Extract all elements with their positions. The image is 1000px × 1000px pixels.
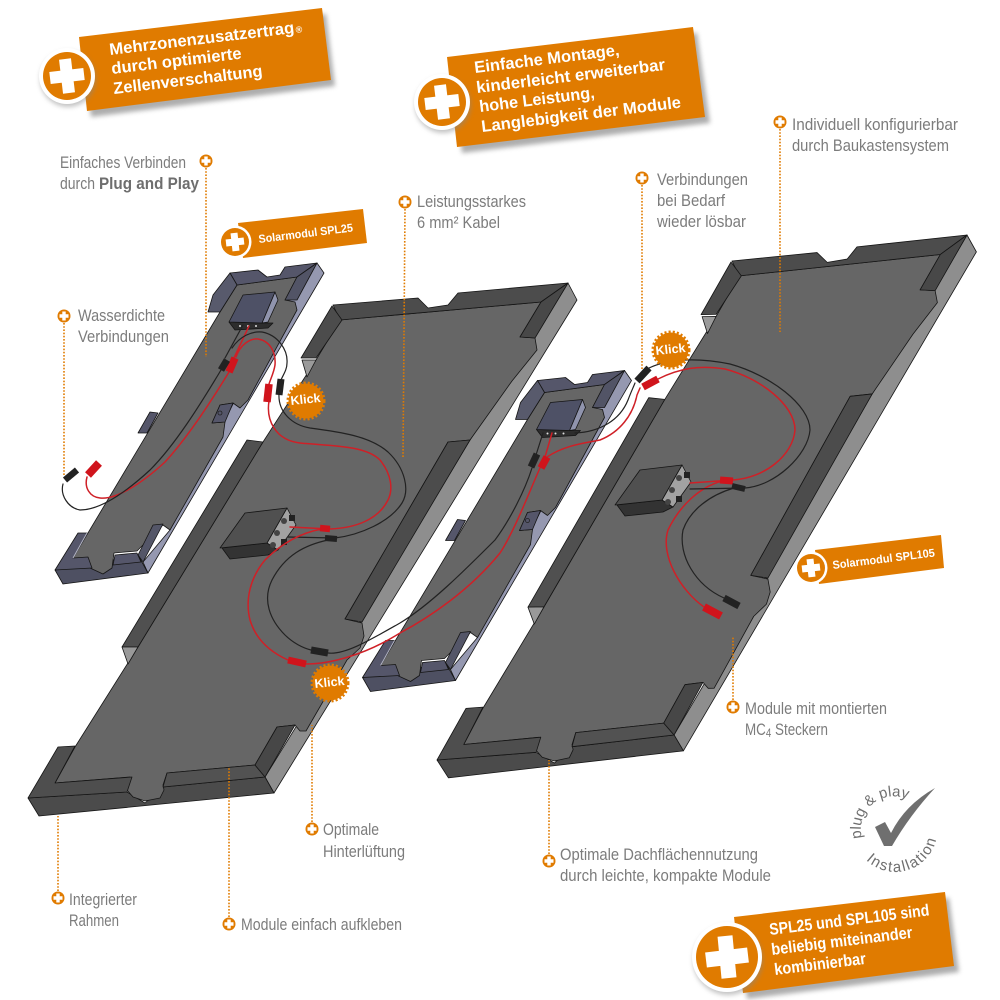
label: Module mit MC4 Steckern bbox=[726, 636, 887, 740]
label: Module einfach aufkleben bbox=[222, 768, 402, 934]
label: Einfaches Verbinden: Einfaches Verbinden bbox=[60, 154, 186, 172]
Klick badge right: Klick bbox=[655, 341, 686, 358]
callout: Mehrzonenzusatzertrag bbox=[39, 8, 335, 117]
solar module SPL105 left bbox=[28, 283, 577, 816]
tag: Solarmodul SPL25: Solarmodul SPL25 bbox=[258, 222, 354, 246]
label: Module einfach aufkleben: Module einfach aufkleben bbox=[241, 916, 402, 934]
label: Integrierter Rahmen bbox=[52, 816, 137, 930]
label: Individuell konfigurierbar: durch Baukastensystem bbox=[792, 137, 949, 155]
Klick badge bottom bbox=[312, 666, 348, 700]
solar module SPL105 right bbox=[426, 235, 988, 778]
plug and play installation stamp: Installation bbox=[867, 838, 936, 872]
label: Verbindungen lösbar bbox=[636, 171, 748, 370]
callout: Mehrzonenzusatzertrag: Mehrzonenzusatzertrag bbox=[108, 19, 295, 59]
Klick badge left: Klick bbox=[290, 391, 321, 408]
callout: Einfache Montage: Einfache Montage, bbox=[473, 41, 620, 77]
solar module SPL25 left bbox=[55, 263, 324, 584]
label: Optimale Hinterlüftung: Optimale bbox=[323, 821, 379, 839]
Klick badge left bbox=[288, 384, 324, 418]
callout: Einfache Montage: Langlebigkeit der Module bbox=[480, 94, 682, 136]
callout: Einfache Montage bbox=[414, 27, 710, 153]
callout: Einfache Montage: hohe Leistung, bbox=[478, 84, 596, 116]
label: Individuell konfigurierbar bbox=[774, 116, 958, 332]
Klick badge bottom: Klick bbox=[314, 674, 345, 691]
callout: SPL25 und SPL105 bbox=[692, 892, 959, 999]
callout: SPL25 und SPL105: kombinierbar bbox=[773, 950, 867, 979]
callout: SPL25 und SPL105: SPL25 und SPL105 sind bbox=[768, 901, 930, 939]
label: Integrierter Rahmen: Rahmen bbox=[69, 912, 119, 930]
label: Einfaches Verbinden: Plug and Play bbox=[99, 175, 200, 193]
label: Optimale Hinterlüftung bbox=[306, 725, 405, 861]
label: Module mit MC4 Steckern: 4 bbox=[766, 726, 772, 740]
callout: Mehrzonenzusatzertrag: durch optimierte bbox=[110, 45, 243, 78]
callout: Einfache Montage: kinderleicht erweiterbar bbox=[475, 56, 667, 97]
label: Leistungsstarkes Kabel bbox=[398, 193, 526, 458]
callout: Mehrzonenzusatzertrag: Zellenverschaltung bbox=[112, 62, 263, 98]
check mark bbox=[875, 788, 935, 846]
tag: Solarmodul SPL25 bbox=[218, 209, 367, 258]
label: Optimale Dachflächennutzung: durch leichte, kompakte Module bbox=[560, 867, 771, 885]
label: Verbindungen lösbar: Verbindungen bbox=[657, 171, 748, 189]
label: Leistungsstarkes Kabel: 6 mm² Kabel bbox=[417, 214, 500, 232]
callout: Mehrzonenzusatzertrag: ® bbox=[295, 24, 303, 35]
label: Module mit MC4 Steckern: Steckern bbox=[771, 721, 828, 739]
label: Optimale Dachflächennutzung bbox=[542, 760, 771, 885]
tag: Solarmodul SPL105 bbox=[794, 535, 944, 584]
tag: Solarmodul SPL105: Solarmodul SPL105 bbox=[832, 547, 936, 572]
label: Leistungsstarkes Kabel: Leistungsstarkes bbox=[417, 193, 526, 211]
label: Wasserdichte Verbindungen bbox=[58, 307, 169, 475]
label: Integrierter Rahmen: Integrierter bbox=[69, 891, 137, 909]
label: Optimale Dachflächennutzung: Optimale Dachflächennutzung bbox=[560, 846, 758, 864]
label: Optimale Hinterlüftung: Hinterlüftung bbox=[323, 843, 405, 861]
label: Verbindungen lösbar: wieder lösbar bbox=[656, 213, 746, 231]
cables right group bbox=[531, 360, 810, 616]
label: Module mit MC4 Steckern: MC bbox=[745, 721, 771, 739]
label: Module mit MC4 Steckern: Module mit montierten bbox=[745, 700, 887, 718]
cables left group bbox=[62, 325, 540, 664]
plug and play installation stamp bbox=[850, 786, 936, 872]
label: Wasserdichte Verbindungen: Verbindungen bbox=[78, 328, 169, 346]
Klick badge right bbox=[654, 332, 688, 368]
label: Verbindungen lösbar: bei Bedarf bbox=[657, 192, 725, 210]
plug and play installation stamp: plug & play bbox=[850, 786, 910, 838]
label: Individuell konfigurierbar: Individuell konfigurierbar bbox=[792, 116, 958, 134]
label: Einfaches Verbinden: durch bbox=[60, 175, 95, 193]
callout: SPL25 und SPL105: beliebig miteinander bbox=[770, 924, 914, 959]
label: Wasserdichte Verbindungen: Wasserdichte bbox=[78, 307, 165, 325]
solar module SPL25 right bbox=[362, 370, 632, 692]
label: Einfaches Verbinden bbox=[60, 154, 212, 357]
